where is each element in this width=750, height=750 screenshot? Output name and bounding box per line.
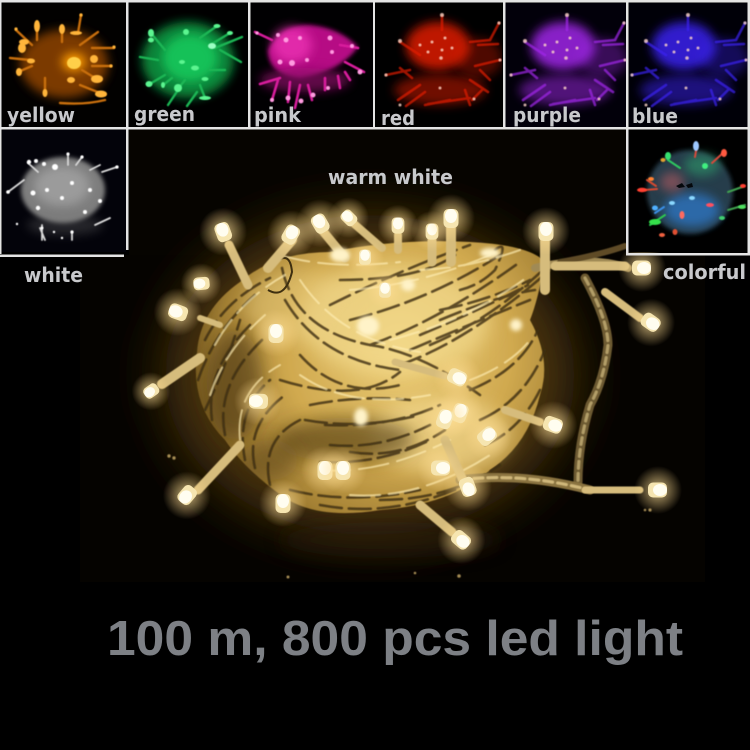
LED bulbs (124, 189, 685, 574)
label: white: white (24, 263, 83, 287)
wire strands (198, 245, 550, 509)
white frame lines (0, 0, 750, 257)
label: yellow: yellow (7, 103, 75, 127)
thumbnail: green (135, 15, 244, 108)
thumbnail: yellow (8, 12, 116, 106)
wire ball (196, 241, 545, 513)
thumbnail: red (384, 12, 502, 112)
label: red: red (381, 106, 415, 130)
LED stems (162, 222, 640, 532)
label: purple: purple (513, 103, 581, 127)
thumbnail: white (2, 130, 126, 252)
title: 100 m, 800 pcs led light (107, 612, 683, 666)
label: warm white: warm white (328, 165, 453, 189)
thumbnail: pink (253, 20, 366, 110)
mask below the photo (0, 582, 750, 750)
label: blue: blue (632, 104, 678, 128)
label: green: green (134, 102, 195, 126)
thumbnail: purple (505, 3, 627, 127)
reflections (167, 454, 652, 578)
thumbnail: blue (630, 12, 748, 116)
thumbnail: colorful (629, 130, 748, 252)
label: colorful: colorful (663, 260, 746, 284)
photo backdrop glow (80, 129, 705, 582)
label: pink: pink (254, 103, 302, 127)
loose wire loop (268, 258, 292, 293)
bright highlights inside ball (330, 248, 522, 426)
braided cable (460, 246, 628, 490)
